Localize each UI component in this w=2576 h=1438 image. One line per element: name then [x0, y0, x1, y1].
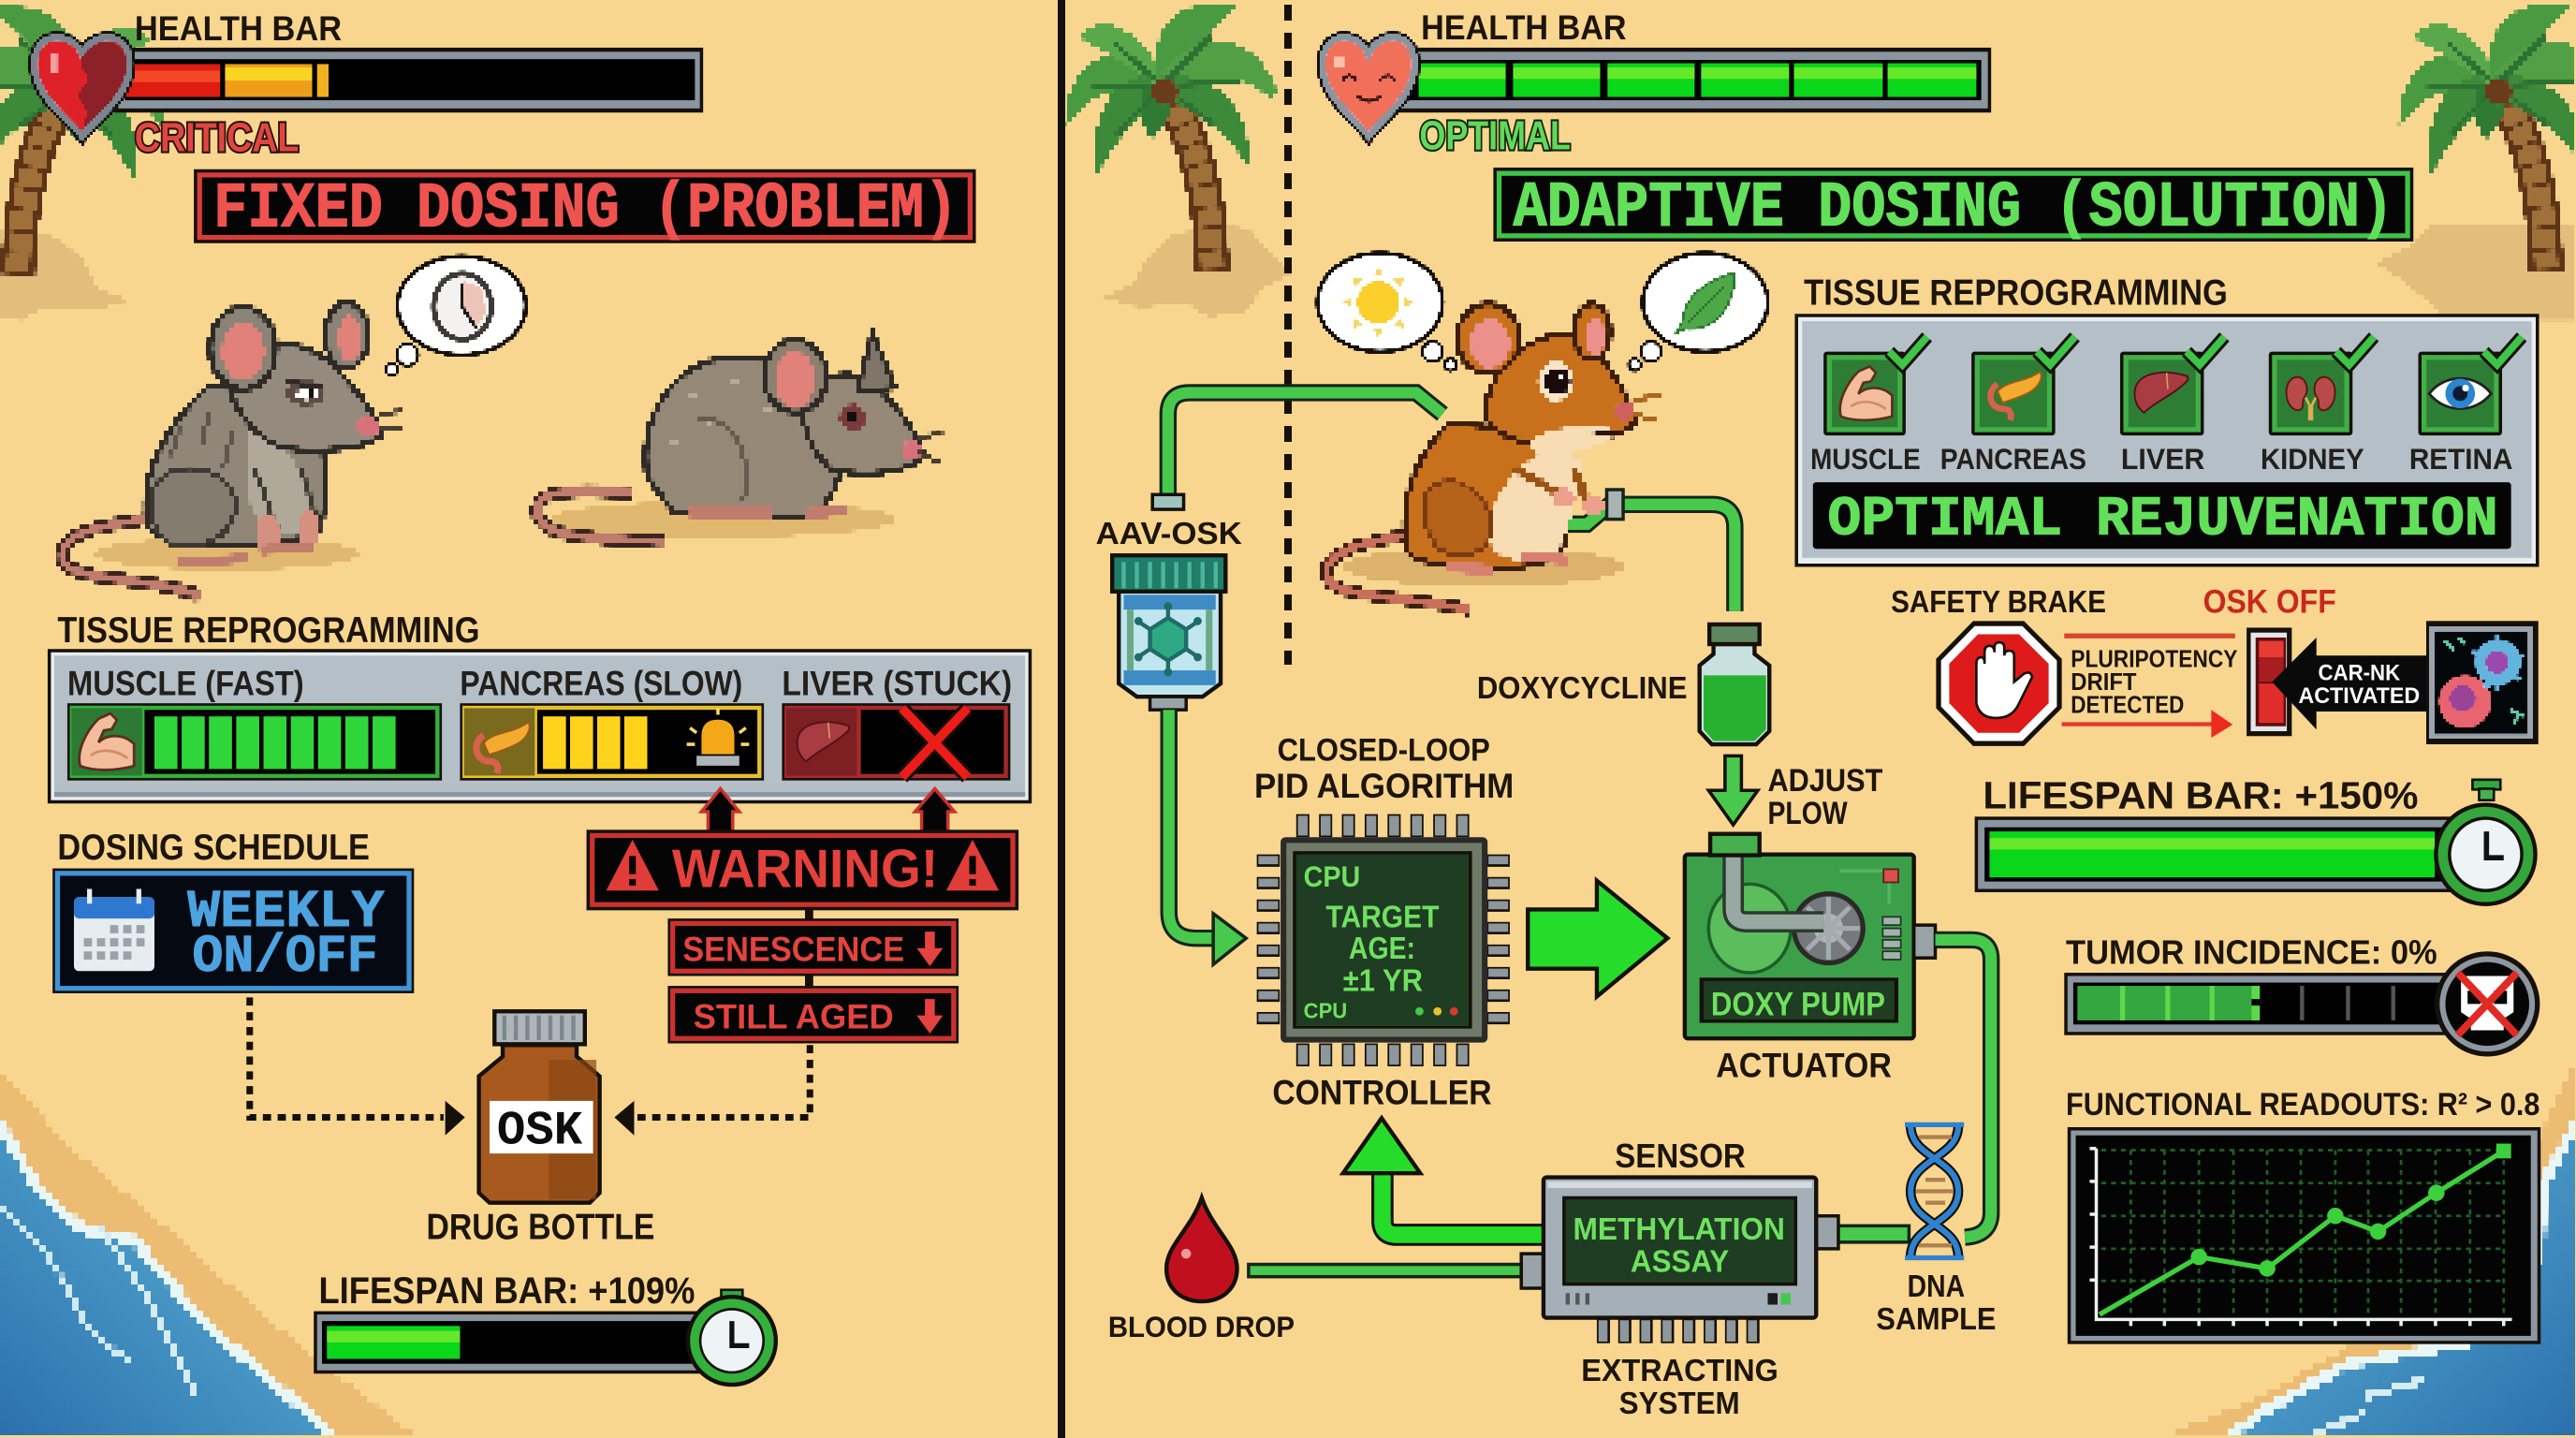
thought bubble: sun — [1318, 253, 1456, 371]
organ: kidney: KIDNEY — [2261, 442, 2364, 476]
icon: CPU controller — [1268, 826, 1499, 1055]
organ: pancreas — [1940, 337, 2086, 476]
bar: pancreas slow — [460, 703, 764, 781]
label: closed-loop PID algorithm — [1254, 733, 1514, 805]
pipe: doxycycline to mouse — [1553, 490, 1734, 611]
right health bar — [1323, 8, 1991, 159]
icon: AAV-OSK vial and tip — [1112, 494, 1225, 710]
icon: palm tree, left panel — [0, 11, 159, 320]
icon: OSK drug bottle — [479, 1011, 600, 1203]
status: optimal: OPTIMAL — [1419, 113, 1571, 159]
connector and still aged flag: STILL AGED — [694, 998, 894, 1036]
icon: virus — [1134, 602, 1202, 676]
arrow: car-nk activated: CAR-NK — [2318, 662, 2400, 686]
ocean: bottom-left shoreline — [0, 1070, 419, 1438]
lifespan bar +109% — [314, 1270, 778, 1387]
arrow: car-nk activated — [2272, 638, 2426, 729]
schedule text — [187, 882, 385, 987]
thought bubble: clock — [386, 257, 526, 375]
panel frame and labels — [48, 649, 1032, 803]
dotted arrow: schedule to bottle — [250, 997, 465, 1136]
rat 1: aged grey rat sitting — [62, 302, 404, 596]
lifespan bar +150% — [1975, 774, 2538, 906]
icon: happy heart — [1323, 37, 1414, 137]
warning stack — [587, 788, 1018, 1043]
note: pluripotency drift detected: PLURIPOTENCY — [2071, 645, 2238, 673]
ocean: bottom-right shoreline — [2156, 1060, 2576, 1438]
pipe: pump to DNA sample — [1936, 940, 1991, 1238]
icon: OSK drug bottle: OSK — [497, 1106, 583, 1159]
label: adjust flow — [1767, 763, 1882, 831]
icon: stopwatch — [2434, 780, 2538, 906]
title: adaptive dosing: ADAPTIVE DOSING (SOLUTION) — [1513, 171, 2393, 244]
pipe with arrow: vial to controller — [1169, 710, 1246, 964]
icon: DNA helix — [1905, 1123, 1964, 1260]
banner: warning — [587, 829, 1018, 910]
icon: methylation assay sensor: METHYLATION — [1573, 1212, 1785, 1247]
icon: skull with red cross — [2435, 951, 2539, 1057]
organ: kidney — [2261, 337, 2374, 476]
heading: dosing schedule: DOSING SCHEDULE — [57, 828, 370, 868]
icon: stop sign with hand — [1936, 621, 2062, 746]
bar: liver stuck — [782, 703, 1010, 781]
label: DNA sample — [1876, 1269, 1996, 1337]
rat 2: aged grey rat on all fours — [537, 333, 943, 542]
label: health bar: HEALTH BAR — [135, 9, 342, 48]
bar — [1975, 816, 2452, 892]
arrow: sensor back to controller — [1343, 1118, 1544, 1235]
organ: muscle — [1810, 337, 1927, 476]
icon: stopwatch — [686, 1290, 778, 1387]
line: blood to sensor — [1249, 1254, 1544, 1288]
note: pluripotency drift detected — [2062, 634, 2238, 738]
label: osk off: OSK OFF — [2203, 584, 2336, 621]
banner: optimal rejuvenation: OPTIMAL REJUVENATION — [1828, 487, 2498, 550]
label: doxycycline: DOXYCYCLINE — [1477, 671, 1687, 706]
organ: retina — [2409, 337, 2522, 476]
gauge: optimal bar — [1397, 48, 1991, 112]
arrow: controller to actuator — [1528, 881, 1667, 996]
connector and still aged flag — [667, 975, 959, 1043]
label: adjust flow: PLOW — [1767, 796, 1848, 831]
organ: muscle: MUSCLE — [1810, 442, 1921, 476]
dashed boundary line — [1284, 5, 1292, 665]
label: drug bottle: DRUG BOTTLE — [426, 1207, 654, 1247]
icon: doxy pump actuator: DOXY PUMP — [1711, 987, 1885, 1023]
title: fixed dosing: FIXED DOSING (PROBLEM) — [213, 172, 958, 245]
arrows up to pancreas and liver — [701, 788, 955, 833]
icon: OSK switch off — [2247, 627, 2291, 736]
label: health bar: HEALTH BAR — [1421, 8, 1627, 47]
arrow: adjust flow — [1708, 756, 1758, 825]
dotted arrow: warning to bottle — [614, 1045, 810, 1136]
icon: methylation assay sensor — [1544, 1178, 1816, 1331]
safety brake group — [1891, 584, 2538, 746]
status: critical: CRITICAL — [135, 114, 299, 160]
heading: tissue reprogramming right: TISSUE REPROGRAMMING — [1804, 273, 2228, 314]
left health bar — [35, 9, 703, 160]
panel frame — [1794, 314, 2539, 567]
label: LIFESPAN BAR: +150% — [1983, 774, 2419, 817]
schedule text: WEEKLY — [187, 882, 385, 942]
bar — [2064, 973, 2451, 1035]
label: controller: CONTROLLER — [1272, 1073, 1492, 1111]
heading: tissue reprogramming left: TISSUE REPROGRAMMING — [57, 610, 479, 651]
line: sensor to DNA sample — [1816, 1216, 1909, 1249]
panel divider — [1058, 0, 1065, 1438]
organ: retina: RETINA — [2409, 442, 2512, 476]
connector and senescence flag: SENESCENCE — [682, 931, 904, 969]
label: extracting system: EXTRACTING — [1581, 1354, 1778, 1388]
label: safety brake: SAFETY BRAKE — [1891, 585, 2106, 620]
tumor incidence — [2064, 932, 2539, 1057]
label: TUMOR INCIDENCE: 0% — [2066, 932, 2437, 971]
icon: palm tree, right panel centre — [1071, 7, 1290, 317]
label: DNA sample: DNA — [1908, 1269, 1965, 1304]
organ: liver: LIVER — [2121, 442, 2205, 476]
note: pluripotency drift detected: DETECTED — [2071, 691, 2184, 719]
label: closed-loop PID algorithm: PID ALGORITHM — [1254, 767, 1514, 805]
label: sensor: SENSOR — [1615, 1137, 1746, 1175]
label: blood drop: BLOOD DROP — [1108, 1310, 1295, 1343]
label: LIFESPAN BAR: +109% — [318, 1270, 695, 1312]
icon: NK cell attacking tumor cell — [2425, 622, 2538, 743]
icon: doxycycline bottle — [1700, 624, 1769, 744]
label: closed-loop PID algorithm: CLOSED-LOOP — [1278, 733, 1490, 769]
icon: palm tree, far right — [2376, 7, 2576, 320]
label: actuator: ACTUATOR — [1716, 1046, 1892, 1084]
functional readouts — [2066, 1087, 2540, 1344]
panel: weekly on/off schedule — [52, 869, 414, 993]
connector and senescence flag — [667, 909, 959, 976]
icon: CPU controller: TARGET — [1325, 901, 1439, 935]
label: extracting system — [1581, 1354, 1778, 1421]
label: adjust flow: ADJUST — [1767, 763, 1882, 799]
organ: pancreas: PANCREAS — [1940, 442, 2086, 476]
label: DNA sample: SAMPLE — [1876, 1302, 1996, 1337]
gauge: critical bar — [115, 48, 703, 112]
panel frame and labels: MUSCLE (FAST) — [67, 664, 304, 702]
schedule text: ON/OFF — [192, 927, 378, 987]
pipe: AAV-OSK to mouse — [1168, 392, 1442, 496]
note: pluripotency drift detected: DRIFT — [2071, 668, 2137, 696]
icon: methylation assay sensor: ASSAY — [1631, 1244, 1729, 1279]
panel: tissue reprogramming optimal — [1794, 314, 2539, 567]
icon: CPU controller: CPU — [1304, 998, 1347, 1022]
panel frame and labels: LIVER (STUCK) — [782, 664, 1012, 702]
label: extracting system: SYSTEM — [1619, 1387, 1740, 1421]
icon: broken heart — [35, 37, 130, 137]
icon: calendar — [74, 889, 154, 971]
organ: liver — [2120, 337, 2224, 476]
icon: CPU controller: CPU — [1304, 859, 1360, 893]
banner: warning: WARNING! — [672, 840, 938, 900]
chart: functional readouts line chart — [2068, 1127, 2540, 1344]
bar — [314, 1312, 708, 1373]
arrow: car-nk activated: ACTIVATED — [2298, 684, 2420, 709]
label: AAV-OSK: AAV-OSK — [1096, 517, 1242, 551]
icon: CPU controller: AGE: — [1349, 932, 1415, 966]
icon: doxy pump actuator — [1685, 834, 1936, 1038]
mouse: rejuvenated brown mouse — [1326, 304, 1660, 609]
bar: muscle fast — [67, 703, 442, 781]
panel: tissue reprogramming status — [48, 649, 1032, 803]
thought bubble: leaf — [1629, 253, 1767, 371]
panel frame and labels: PANCREAS (SLOW) — [460, 664, 742, 702]
icon: blood drop — [1166, 1197, 1237, 1301]
icon: CPU controller: ±1 YR — [1343, 963, 1423, 998]
